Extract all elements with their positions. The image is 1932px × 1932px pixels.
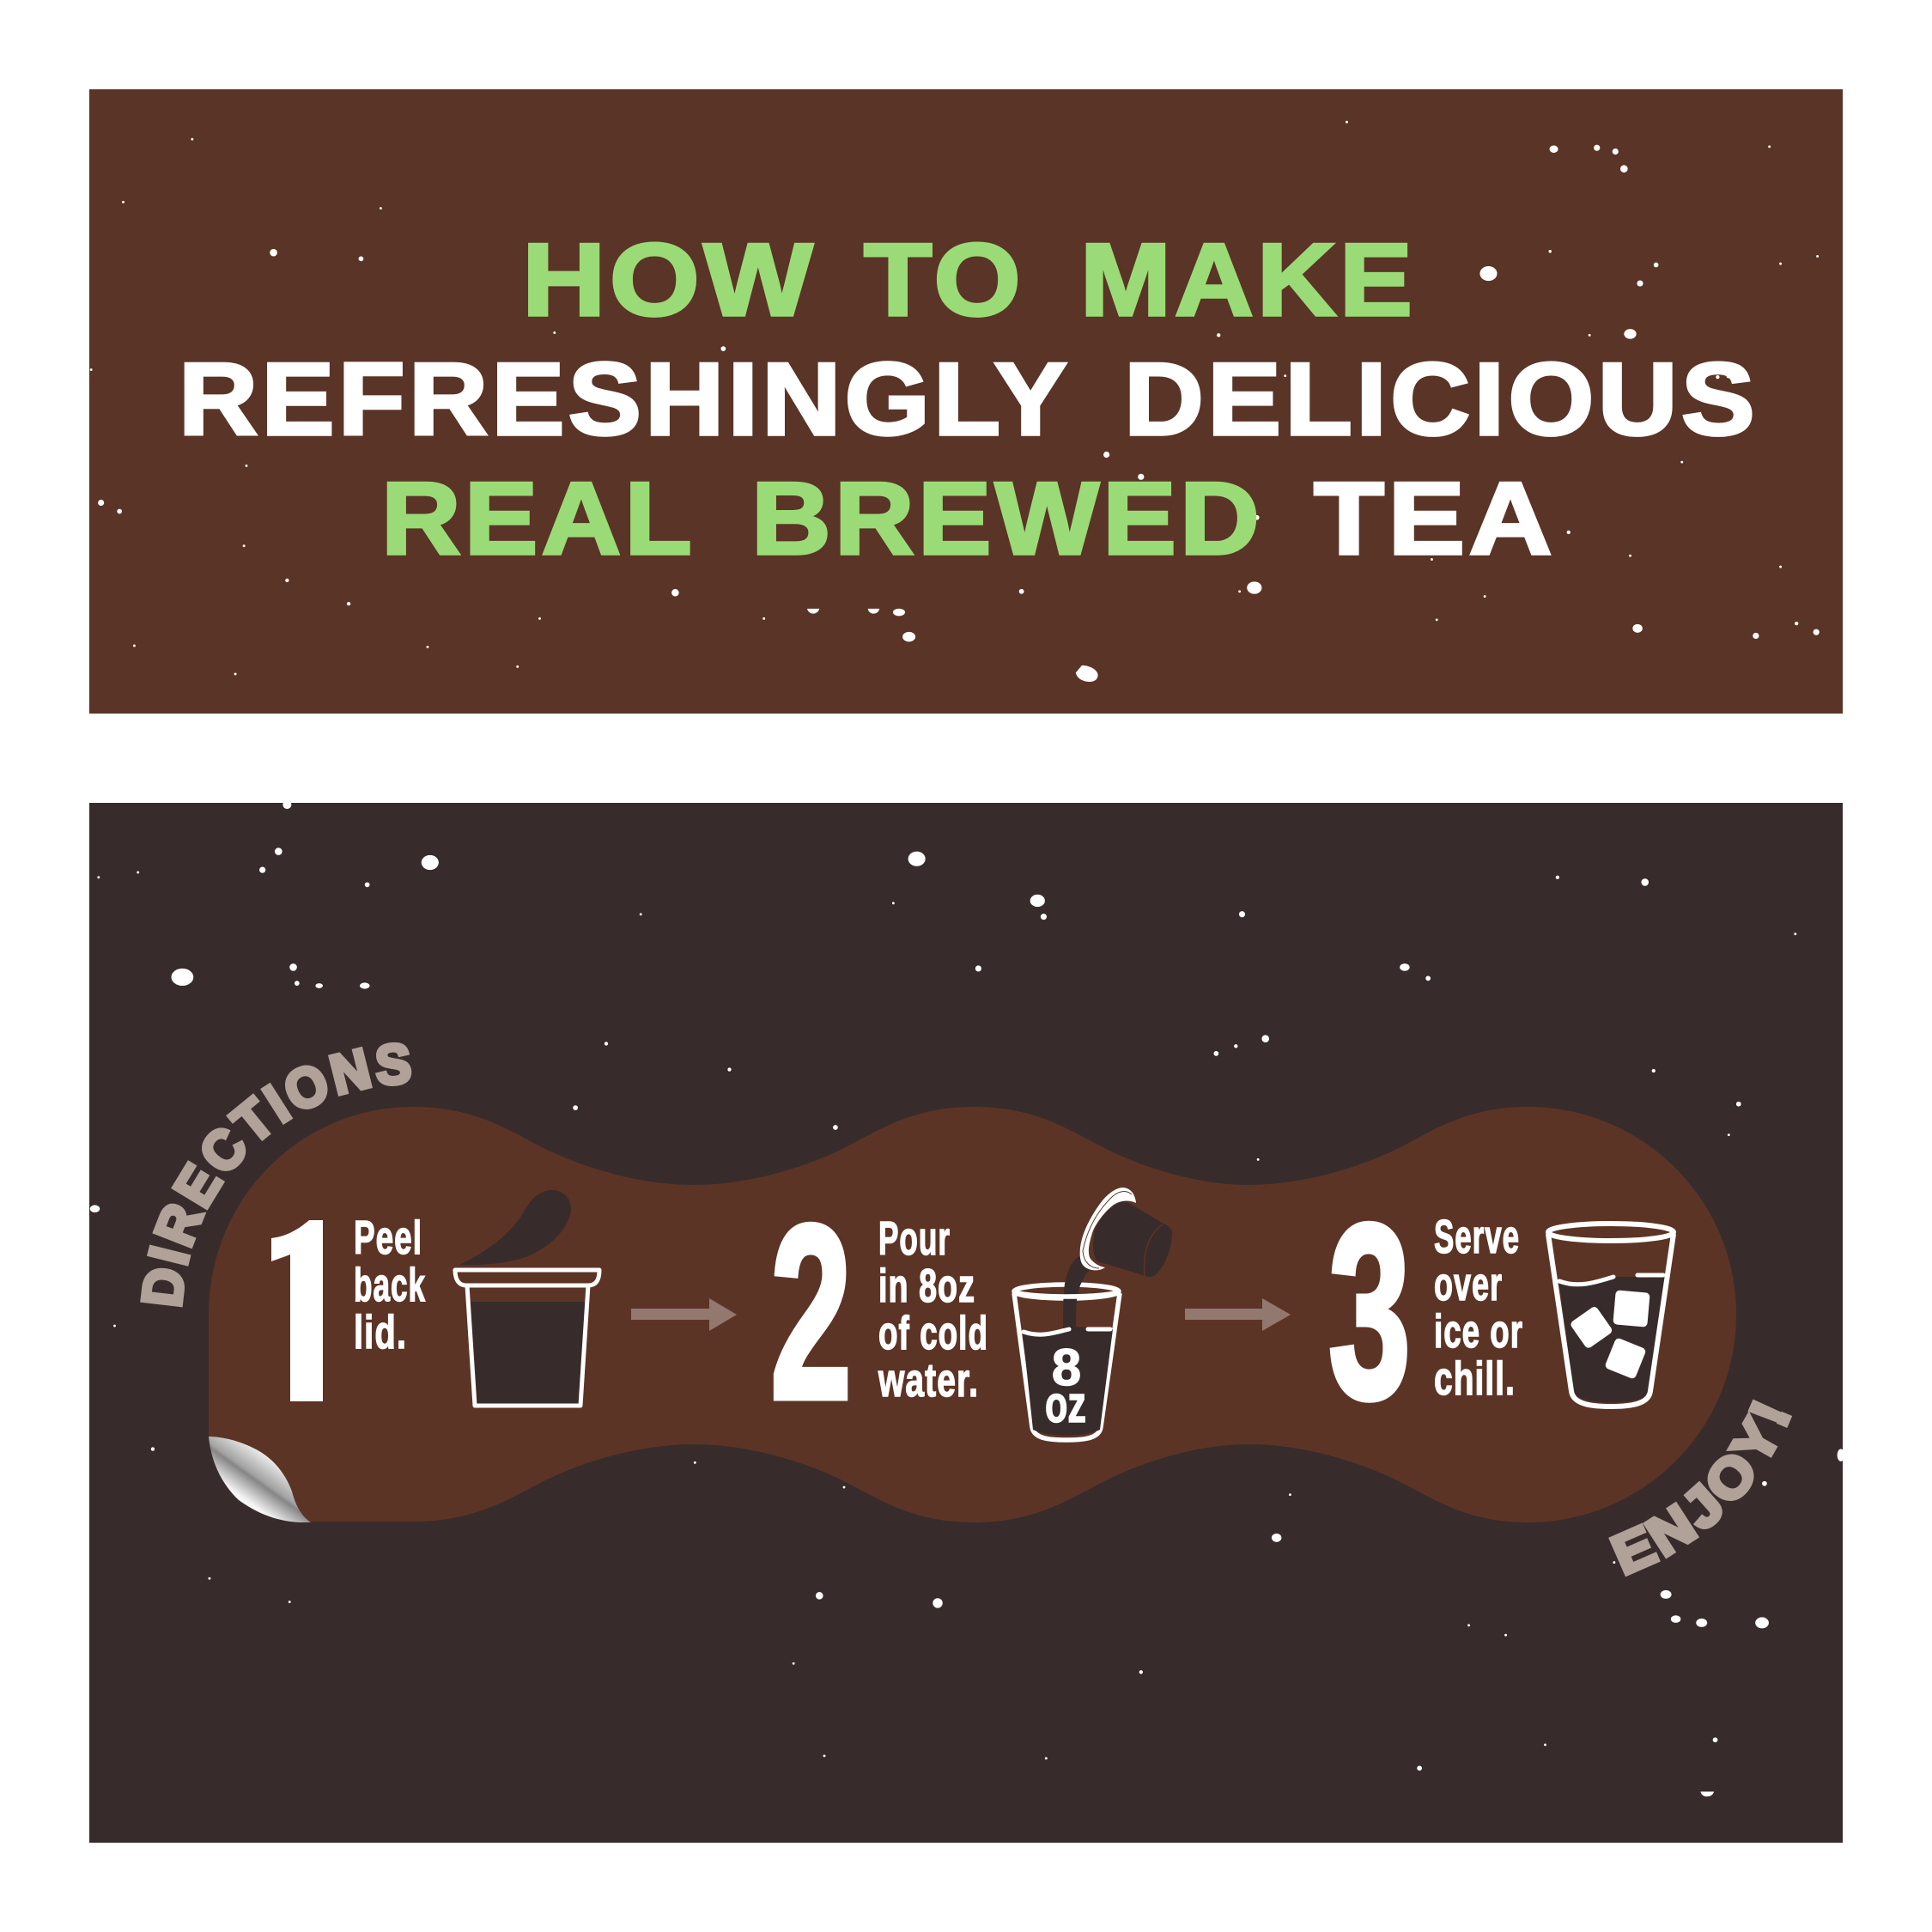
specks: title panel (90, 121, 1820, 682)
arrow: step 2 to 3 (1185, 1298, 1291, 1331)
pod rim (1080, 1188, 1136, 1270)
glass outline (1548, 1234, 1674, 1406)
step 1 text: back (354, 1258, 426, 1311)
title: DELICIOUS (1124, 342, 1759, 457)
pour stream (1063, 1256, 1091, 1329)
title: BREWED (751, 461, 1263, 576)
label: directions: DIRECTIONS (140, 1042, 412, 1307)
step 2 text: in 8oz (878, 1259, 975, 1312)
step 3 text: over (1434, 1257, 1503, 1310)
specks: directions panel (90, 800, 1844, 1796)
step 3 text: chill. (1434, 1352, 1516, 1405)
panel: directions background (89, 803, 1843, 1843)
title: TO (864, 222, 1024, 337)
panel: title background (89, 89, 1843, 714)
step 1 text: Peel (354, 1211, 422, 1264)
step 2 number: 2 (770, 1174, 852, 1451)
step 3 text (1434, 1210, 1523, 1405)
level lines (1559, 1275, 1663, 1285)
step 2 text: water. (878, 1353, 979, 1406)
ice cubes (1570, 1305, 1613, 1350)
icon: tea pod with peeled lid (455, 1190, 599, 1406)
pod rim inner line (1083, 1191, 1132, 1268)
directions blob (209, 1107, 1736, 1522)
step 2 text: of cold (878, 1306, 988, 1359)
icon: pod pouring into glass: oz (1045, 1376, 1086, 1433)
title: REFRESHINGLY (179, 342, 1071, 457)
peeled corner curl (209, 1437, 311, 1522)
title: TEA (1314, 461, 1556, 576)
pod cap line (1145, 1224, 1163, 1276)
front rim (1014, 1291, 1119, 1297)
step 2 text: Pour (878, 1212, 951, 1265)
step 1 text (354, 1211, 426, 1358)
title: REAL (381, 461, 696, 576)
tea fill (1559, 1277, 1668, 1402)
step 1 number: 1 (236, 1166, 369, 1455)
title (179, 222, 1759, 576)
glass outline (1014, 1293, 1120, 1440)
label: enjoy: ENJOY! (1608, 1400, 1793, 1577)
step 1 text: lid. (354, 1305, 407, 1358)
step 3 text: ice or (1434, 1304, 1523, 1358)
liquid level lines (1024, 1329, 1110, 1334)
glass label: 8 (1052, 1339, 1081, 1396)
arrow: step 1 to 2 (631, 1298, 737, 1331)
step 2 text (878, 1212, 988, 1406)
pod body (1093, 1200, 1172, 1277)
title: HOW (522, 222, 817, 337)
step 3 text: Serve (1434, 1210, 1520, 1263)
step 3 number: 3 (1328, 1173, 1411, 1450)
title: MAKE (1080, 222, 1416, 337)
icon: pod pouring into glass (1014, 1188, 1172, 1440)
icon: iced tea glass (1548, 1224, 1674, 1406)
liquid in glass (1023, 1327, 1113, 1436)
